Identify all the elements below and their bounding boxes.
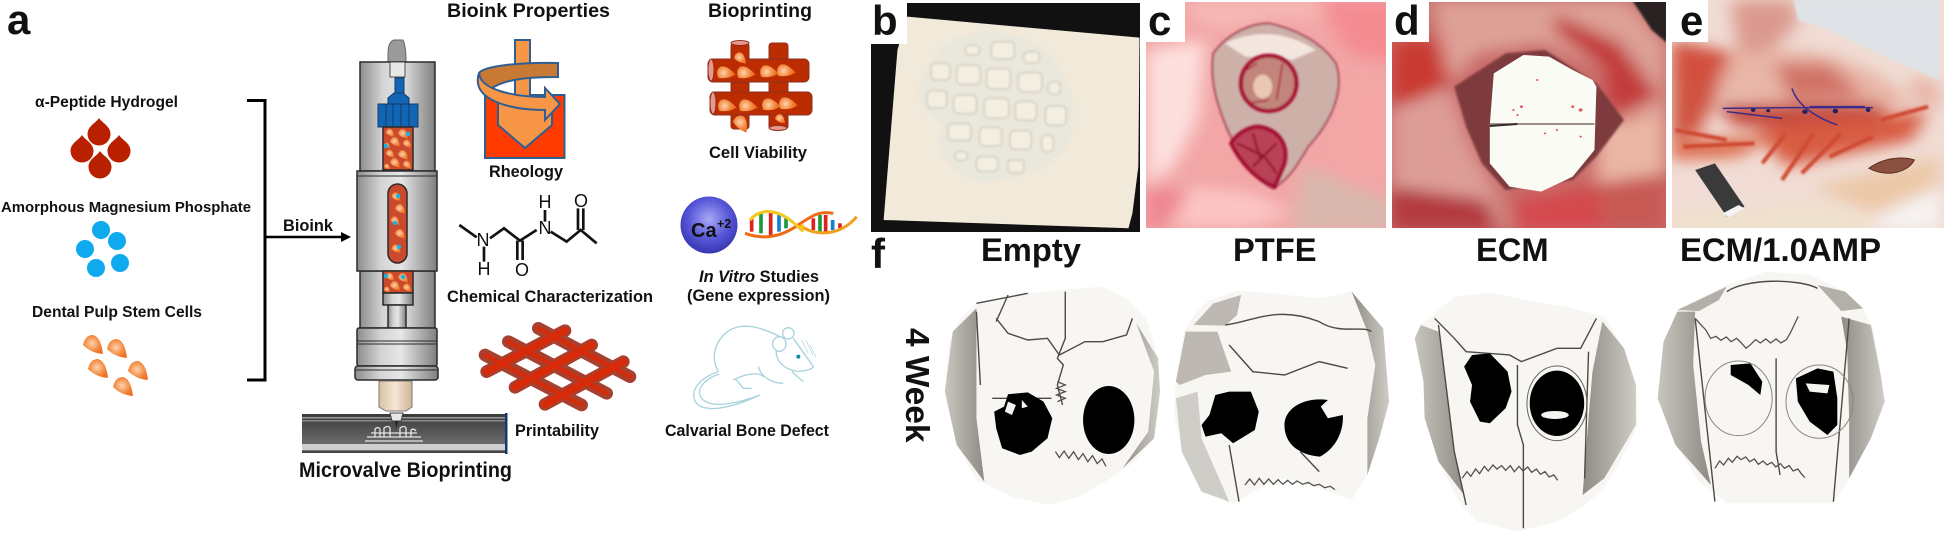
- icon: rat: [694, 326, 816, 409]
- group titles: ECM: [1476, 231, 1549, 268]
- group titles: Empty: [981, 231, 1081, 268]
- PTFE membrane: [1490, 55, 1596, 192]
- wound: [1212, 23, 1339, 188]
- chemical structure: N: [538, 218, 552, 238]
- syringe lower and plunger: [383, 271, 413, 328]
- group titles: ECM/1.0AMP: [1680, 231, 1881, 268]
- eye: [1869, 158, 1914, 173]
- chemical structure: N: [476, 230, 490, 250]
- ingredient: alpha-peptide hydrogel: α-Peptide Hydrogel: [35, 94, 178, 111]
- defects: [1731, 363, 1762, 395]
- middle sleeve: [357, 171, 437, 271]
- panel label e: [1672, 0, 1708, 44]
- skull: ECM: [1415, 292, 1638, 532]
- chemical structure: H: [538, 192, 552, 212]
- icon: calcium ion: [680, 196, 738, 254]
- chemical structure: [459, 191, 597, 280]
- chemical label: Chemical Characterization: [447, 288, 653, 306]
- panel label f: f: [871, 230, 886, 277]
- panel label d: [1392, 0, 1429, 44]
- in vitro label: (Gene expression): [687, 287, 830, 305]
- ingredient: amorphous magnesium phosphate: [1, 199, 251, 277]
- heading: bioprinting: Bioprinting: [708, 0, 812, 22]
- printed scaffold: [365, 426, 423, 441]
- syringe upper: [383, 127, 413, 170]
- skull: ECM/1.0AMP: [1658, 272, 1885, 503]
- icon: printable mesh: [485, 328, 630, 405]
- print stage: [302, 413, 508, 454]
- printer assembly: [355, 40, 438, 411]
- icon: DNA helix: [745, 212, 857, 237]
- panel e: sutured incision photo: [1671, 0, 1944, 230]
- defect 1: [1241, 56, 1296, 111]
- rheology label: Rheology: [489, 163, 564, 181]
- panel a: bioink schematic: [1, 0, 857, 482]
- blue connector: [378, 78, 418, 127]
- defect 2: [1231, 127, 1285, 187]
- printhead base: [357, 328, 437, 366]
- ingredient: dental pulp stem cells: Dental Pulp Stem Cells: [32, 304, 202, 321]
- defects: [1464, 353, 1512, 423]
- chemical structure: O: [574, 191, 588, 211]
- panel f: micro-CT skulls: [871, 230, 1885, 532]
- skull: empty: [945, 287, 1160, 505]
- wound: [1454, 50, 1624, 190]
- capsule window: [388, 184, 407, 263]
- nozzle: [379, 381, 412, 411]
- bracket: [247, 100, 265, 380]
- printer caption: Microvalve Bioprinting: [299, 459, 512, 482]
- icon: calcium ion: Ca: [691, 220, 717, 242]
- in vitro label: [687, 268, 830, 305]
- timepoint label: 4 Week: [898, 328, 935, 443]
- icon: calcium ion: +2: [717, 217, 731, 231]
- skull: PTFE: [1174, 291, 1389, 504]
- panel d: membrane photo: [1391, 0, 1668, 230]
- icon: rheology: [478, 40, 564, 158]
- panel b: printed scaffold photo: [871, 3, 1140, 232]
- panel c: surgical photo defects: [1146, 2, 1386, 228]
- arrow: bioink into printer: Bioink: [283, 217, 334, 235]
- arrow: bioink into printer: [265, 217, 351, 242]
- icon: cell-laden strands: [708, 40, 812, 133]
- ingredient: alpha-peptide hydrogel: [35, 94, 178, 178]
- hydrogel lattice: [924, 39, 1068, 175]
- heading: bioink properties: Bioink Properties: [447, 0, 610, 22]
- sutures: [1723, 88, 1873, 125]
- ingredient: amorphous magnesium phosphate: Amorphous Magnesium Phosphate: [1, 199, 251, 216]
- chemical structure: O: [515, 260, 529, 280]
- in vitro label: In Vitro Studies: [699, 268, 819, 286]
- calvarial label: Calvarial Bone Defect: [665, 422, 829, 440]
- chemical structure: H: [478, 259, 490, 279]
- printability label: Printability: [515, 422, 600, 440]
- cell viability label: Cell Viability: [709, 144, 808, 162]
- ingredient: dental pulp stem cells: [32, 304, 202, 396]
- defects: [994, 392, 1052, 455]
- defects: [1202, 392, 1259, 443]
- red streaks: [1675, 107, 1928, 180]
- group titles: [981, 231, 1881, 268]
- group titles: PTFE: [1233, 231, 1317, 268]
- ruler: [1695, 163, 1745, 217]
- panel label c: [1146, 0, 1185, 44]
